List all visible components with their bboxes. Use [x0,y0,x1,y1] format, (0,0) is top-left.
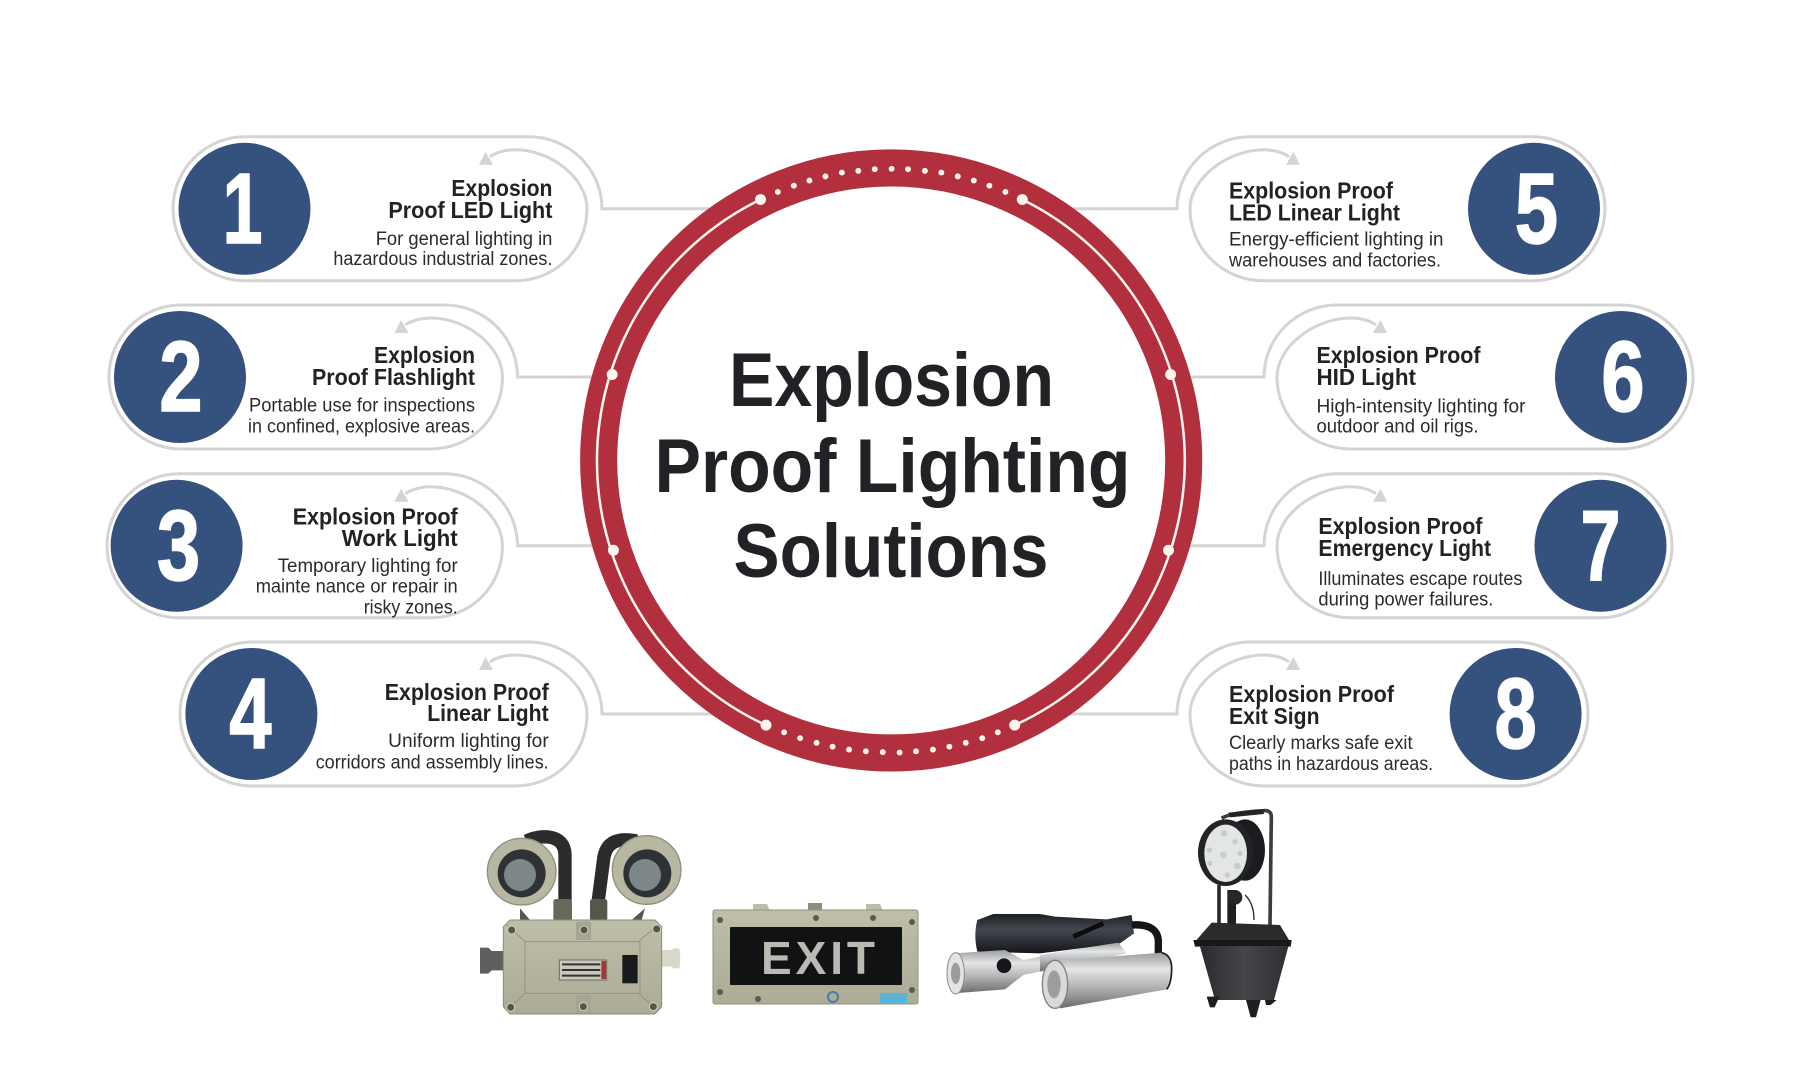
number badge 8 [1450,648,1582,780]
text: item 7: Illuminates escape routes [1318,569,1522,590]
number badge 2: 2 [159,322,203,433]
number badge 7: 7 [1580,490,1621,602]
text: item 2: Portable use for inspections [249,396,475,416]
text: item 7: Explosion Proof [1318,513,1483,539]
text: item 8: Explosion Proof [1229,681,1394,707]
text: item 8: paths in hazardous areas. [1229,754,1433,775]
panel: item 3 Explosion Proof Work Light [107,474,668,618]
text: item 2: in confined, explosive areas. [248,416,475,438]
text: item 5: LED Linear Light [1229,199,1400,225]
number badge 1 [178,143,310,275]
number badge 5 [1468,143,1600,275]
number badge 6 [1555,311,1687,443]
text: item 1: Explosion [451,175,552,201]
panel: item 6 Explosion Proof HID Light [1114,305,1693,449]
text: item 8: Clearly marks safe exit [1229,733,1413,754]
panel: item 4 Explosion Proof Linear Light [180,642,752,786]
text: item 5: Explosion Proof [1229,177,1393,203]
text: item 4: Explosion Proof [385,679,549,705]
outline: pill 8 with connector [1027,642,1588,786]
text: item 8 [1229,681,1433,775]
text: item 3: risky zones. [364,598,458,618]
text: item 1: hazardous industrial zones. [333,249,552,270]
text: item 6: High-intensity lighting for [1316,397,1526,418]
text: item 2: Proof Flashlight [312,364,475,390]
outline: pill 7 with connector [1114,474,1672,618]
text: item 6: outdoor and oil rigs. [1316,417,1478,438]
text: item 3 [256,504,458,618]
text: item 5: warehouses and factories. [1228,250,1441,272]
outline: pill 2 with connector [109,305,668,449]
title: Proof Lighting [654,424,1130,509]
panel: item 1 Explosion Proof LED Light [173,137,752,281]
product: portable work light on stand [1193,809,1292,1017]
text: item 1: Proof LED Light [388,197,553,223]
text: item 3: mainte nance or repair in [256,576,458,598]
panel: item 2 Explosion Proof Flashlight [109,305,668,449]
text: item 3: Explosion Proof [293,504,458,530]
outline: pill 5 with connector [1027,137,1605,281]
outline: pill 4 with connector [180,642,752,786]
text: item 6: Explosion Proof [1316,342,1481,368]
panel: item 5 Explosion Proof LED Linear Light [1027,137,1605,281]
number badge 6: 6 [1601,322,1645,433]
title: Explosion [729,338,1054,423]
text: item 2: Explosion [374,342,475,368]
text: item 6 [1316,342,1526,438]
product: emergency twin-head light [480,836,681,1014]
text: item 2 [248,342,475,438]
text: item 1 [333,175,553,270]
number badge 5: 5 [1515,154,1558,265]
text: item 5 [1228,177,1444,272]
text: item 4: Uniform lighting for [388,731,549,752]
text: item 3: Work Light [342,525,458,551]
text: item 7: during power failures. [1318,590,1493,611]
panel: item 7 Explosion Proof Emergency Light [1114,474,1672,618]
number badge 1: 1 [222,153,263,265]
product: flashlights [947,914,1172,1008]
number badge 4: 4 [229,658,272,769]
number badge 4 [185,648,317,780]
central red ring [597,166,1185,756]
title [654,338,1130,594]
number badge 3 [111,480,243,612]
panel: item 8 Explosion Proof Exit Sign [1027,642,1588,786]
text: item 4 [316,679,549,774]
number badge 2 [114,311,246,443]
text: item 6: HID Light [1316,364,1416,390]
text: item 8: Exit Sign [1229,703,1320,729]
outline: pill 3 with connector [107,474,668,618]
text: item 7: Emergency Light [1318,535,1491,561]
product: EXIT sign [713,903,918,1004]
title: Solutions [734,509,1048,594]
text: item 4: corridors and assembly lines. [316,753,549,774]
text: item 7 [1318,513,1522,611]
number badge 7 [1534,480,1666,612]
product: EXIT sign: EXIT [761,932,875,984]
text: item 5: Energy-efficient lighting in [1229,230,1444,251]
number badge 3: 3 [157,491,200,602]
text: item 1: For general lighting in [376,229,552,250]
text: item 4: Linear Light [427,700,549,726]
number badge 8: 8 [1494,658,1537,769]
outline: pill 1 with connector [173,137,752,281]
outline: pill 6 with connector [1114,305,1693,449]
text: item 3: Temporary lighting for [278,556,458,577]
